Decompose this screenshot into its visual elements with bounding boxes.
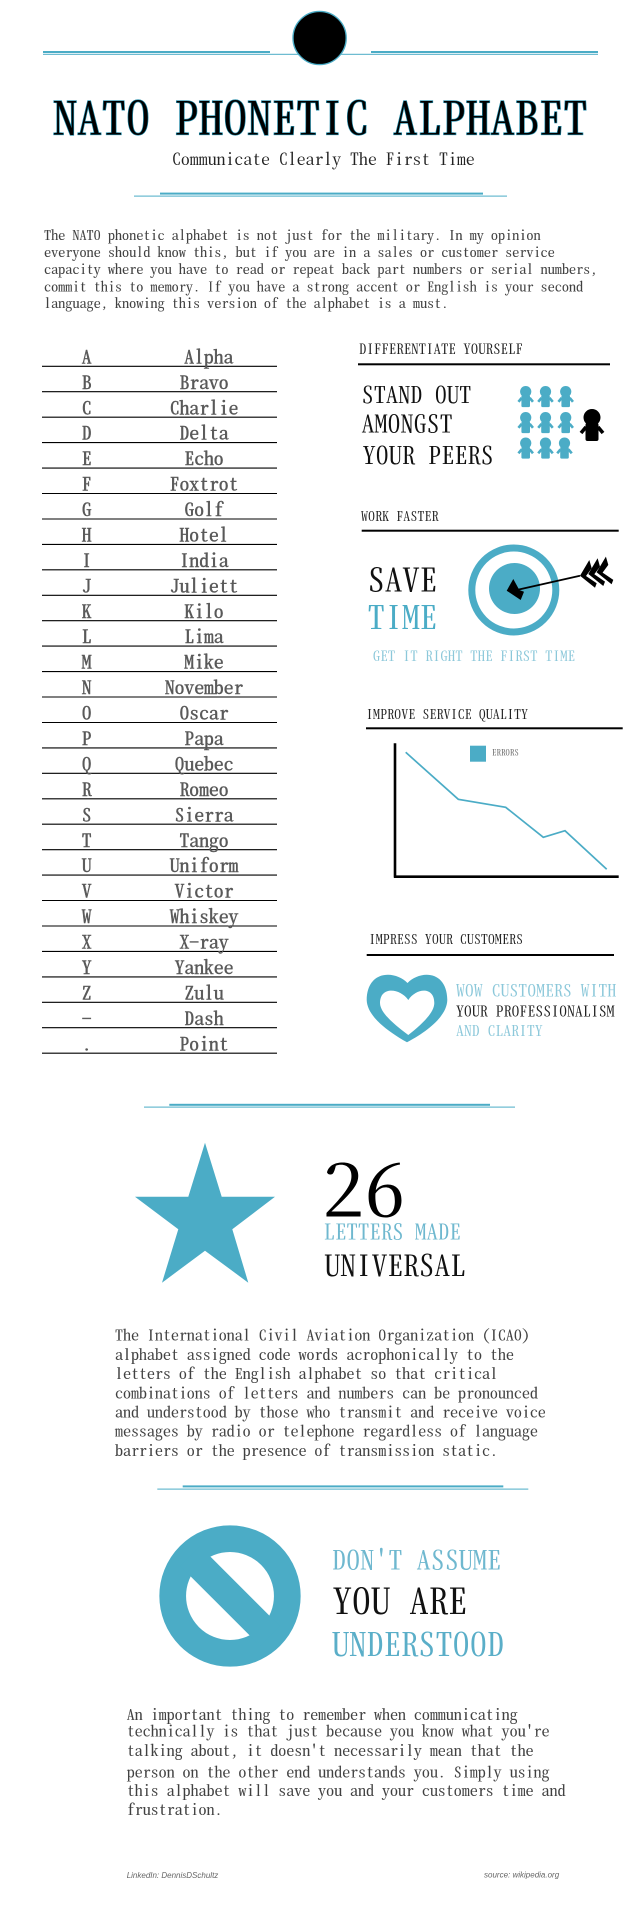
intro paragraph: everyone should know this, but if you are in a sales or customer service	[44, 242, 555, 261]
legend: ERRORS	[492, 747, 519, 759]
heading: DIFFERENTIATE YOURSELF	[359, 339, 523, 359]
icon: star	[135, 1143, 275, 1283]
code words column: Lima	[184, 623, 224, 649]
letters column: W	[82, 903, 92, 929]
code words column: Bravo	[180, 369, 228, 395]
code words column: Delta	[180, 420, 229, 445]
letters column: R	[82, 776, 92, 802]
letters column: L	[82, 623, 92, 649]
code words column: Quebec	[175, 750, 233, 776]
panel: work faster	[361, 506, 619, 666]
letters column: N	[82, 674, 92, 700]
icon: prohibition sign	[173, 1539, 287, 1653]
code words column: Yankee	[175, 954, 233, 980]
letters column: J	[82, 572, 92, 598]
intro paragraph: capacity where you have to read or repeat back part numbers or serial numbers,	[44, 259, 597, 278]
code words column: Point	[180, 1030, 228, 1056]
code words column: Romeo	[180, 776, 228, 802]
customers text: WOW CUSTOMERS WITH	[456, 977, 617, 1002]
callout: don't assume you are understood	[332, 1540, 504, 1666]
letters column: V	[82, 877, 92, 903]
code words column: Foxtrot	[170, 470, 238, 496]
legend	[470, 746, 519, 762]
tagline: GET IT RIGHT THE FIRST TIME	[373, 646, 575, 666]
letters column: S	[82, 801, 92, 827]
icon: blue people group	[518, 386, 573, 459]
letters column: H	[82, 521, 92, 547]
closing paragraph	[127, 1704, 566, 1820]
title: NATO PHONETIC ALPHABET	[53, 84, 588, 148]
code words column: Alpha	[184, 343, 234, 369]
code words column: Tango	[180, 827, 228, 853]
code words column: Hotel	[180, 521, 228, 547]
panel: improve service quality	[366, 704, 623, 877]
code words column: Zulu	[184, 979, 224, 1005]
letters column: M	[82, 649, 92, 674]
code words column: Oscar	[180, 699, 228, 725]
letters column: G	[82, 496, 92, 522]
closing paragraph: An important thing to remember when communicating	[127, 1704, 518, 1725]
code words column: November	[165, 674, 243, 700]
callout: don't assume you are understood: YOU ARE	[332, 1573, 467, 1625]
letters column: I	[82, 547, 92, 573]
code words column: Papa	[184, 725, 224, 751]
letters column: A	[82, 343, 92, 369]
intro paragraph: commit this to memory. If you have a strong accent or English is your second	[44, 276, 583, 295]
ICAO paragraph: The International Civil Aviation Organization (ICAO)	[115, 1324, 530, 1346]
letters column: -	[82, 1005, 92, 1031]
code words column: Sierra	[175, 801, 234, 827]
closing paragraph: person on the other end understands you. Simply using	[127, 1761, 550, 1782]
letters column	[82, 343, 92, 1056]
subtitle: Communicate Clearly The First Time	[172, 146, 475, 170]
stand out text: YOUR PEERS	[362, 437, 494, 472]
letters column: P	[82, 725, 92, 751]
code words column: X-ray	[180, 928, 229, 954]
ICAO paragraph	[114, 1324, 546, 1461]
stat: 26 letters made universal: UNIVERSAL	[324, 1242, 466, 1285]
intro paragraph: The NATO phonetic alphabet is not just for the military. In my opinion	[44, 225, 541, 244]
letters column: X	[82, 928, 92, 954]
letters column: T	[82, 827, 92, 853]
intro paragraph: language, knowing this version of the alphabet is a must.	[44, 293, 448, 312]
closing paragraph: this alphabet will save you and your customers time and	[127, 1780, 566, 1801]
code words column: Charlie	[170, 394, 238, 420]
icon: black person	[581, 409, 603, 441]
divider	[144, 1104, 515, 1108]
code words column: Whiskey	[170, 903, 239, 929]
letters column: F	[82, 470, 92, 496]
letters column: .	[82, 1030, 92, 1056]
ICAO paragraph: and understood by those who transmit and receive voice	[115, 1401, 546, 1423]
panel: impress your customers	[367, 929, 617, 1042]
stand out text	[362, 377, 494, 472]
header rule with circle	[43, 11, 598, 65]
panel: differentiate yourself	[358, 339, 610, 472]
callout: don't assume you are understood: DON'T ASSUME	[332, 1540, 501, 1577]
letters column: K	[82, 598, 92, 624]
ICAO paragraph: combinations of letters and numbers can be pronounced	[115, 1382, 538, 1403]
customers text: AND CLARITY	[456, 1021, 543, 1041]
footer credit: LinkedIn: DennisDSchultz	[127, 1871, 218, 1880]
line chart: errors	[394, 743, 619, 877]
divider	[157, 1485, 528, 1490]
code words column: Juliett	[170, 572, 238, 598]
icon: target with arrow	[472, 548, 613, 632]
heading: IMPRESS YOUR CUSTOMERS	[369, 929, 523, 948]
code words column	[165, 343, 243, 1056]
divider under subtitle	[134, 193, 507, 197]
stand out text: STAND OUT	[362, 377, 471, 410]
closing paragraph: frustration.	[127, 1799, 222, 1820]
letters column: Y	[82, 954, 92, 980]
code words column: Victor	[175, 877, 233, 903]
code words column: Mike	[184, 649, 224, 674]
ICAO paragraph: barriers or the presence of transmission static.	[115, 1440, 498, 1461]
letters column: U	[82, 852, 92, 878]
code words column: Echo	[184, 445, 224, 471]
code words column: Golf	[184, 496, 224, 522]
letters column: E	[82, 445, 92, 471]
footer source: source: wikipedia.org	[484, 1871, 560, 1880]
letters column: Q	[82, 750, 92, 776]
heading: IMPROVE SERVICE QUALITY	[366, 704, 528, 723]
code words column: India	[180, 547, 229, 573]
letters column: Z	[82, 979, 92, 1005]
heading: WORK FASTER	[361, 506, 439, 525]
icon: heart	[367, 975, 447, 1042]
save time text: SAVE	[368, 554, 437, 601]
letters column: B	[82, 369, 92, 395]
panel: work faster: TIME	[368, 592, 437, 639]
code words column: Dash	[184, 1005, 224, 1031]
customers text: YOUR PROFESSIONALISM	[456, 1000, 615, 1022]
code words column: Uniform	[170, 852, 239, 878]
ICAO paragraph: letters of the English alphabet so that critical	[115, 1363, 498, 1384]
ICAO paragraph: messages by radio or telephone regardless of language	[114, 1420, 538, 1442]
closing paragraph: technically is that just because you know what you're	[127, 1720, 549, 1742]
stat: 26 letters made universal	[322, 1136, 466, 1285]
letters column: D	[82, 420, 92, 445]
letters column: O	[82, 699, 92, 725]
stand out text: AMONGST	[362, 406, 453, 440]
letters column: C	[82, 394, 92, 420]
ICAO paragraph: alphabet assigned code words acrophonically to the	[115, 1344, 514, 1365]
callout: don't assume you are understood: UNDERSTOOD	[332, 1620, 504, 1666]
intro paragraph	[44, 225, 597, 312]
code words column: Kilo	[184, 598, 224, 624]
phonetic alphabet table	[42, 343, 277, 1056]
closing paragraph: talking about, it doesn't necessarily mean that the	[127, 1740, 534, 1761]
customers text	[456, 977, 617, 1041]
stat: 26 letters made universal: LETTERS MADE	[324, 1216, 461, 1246]
stat: 26 letters made universal: 26	[322, 1136, 405, 1238]
